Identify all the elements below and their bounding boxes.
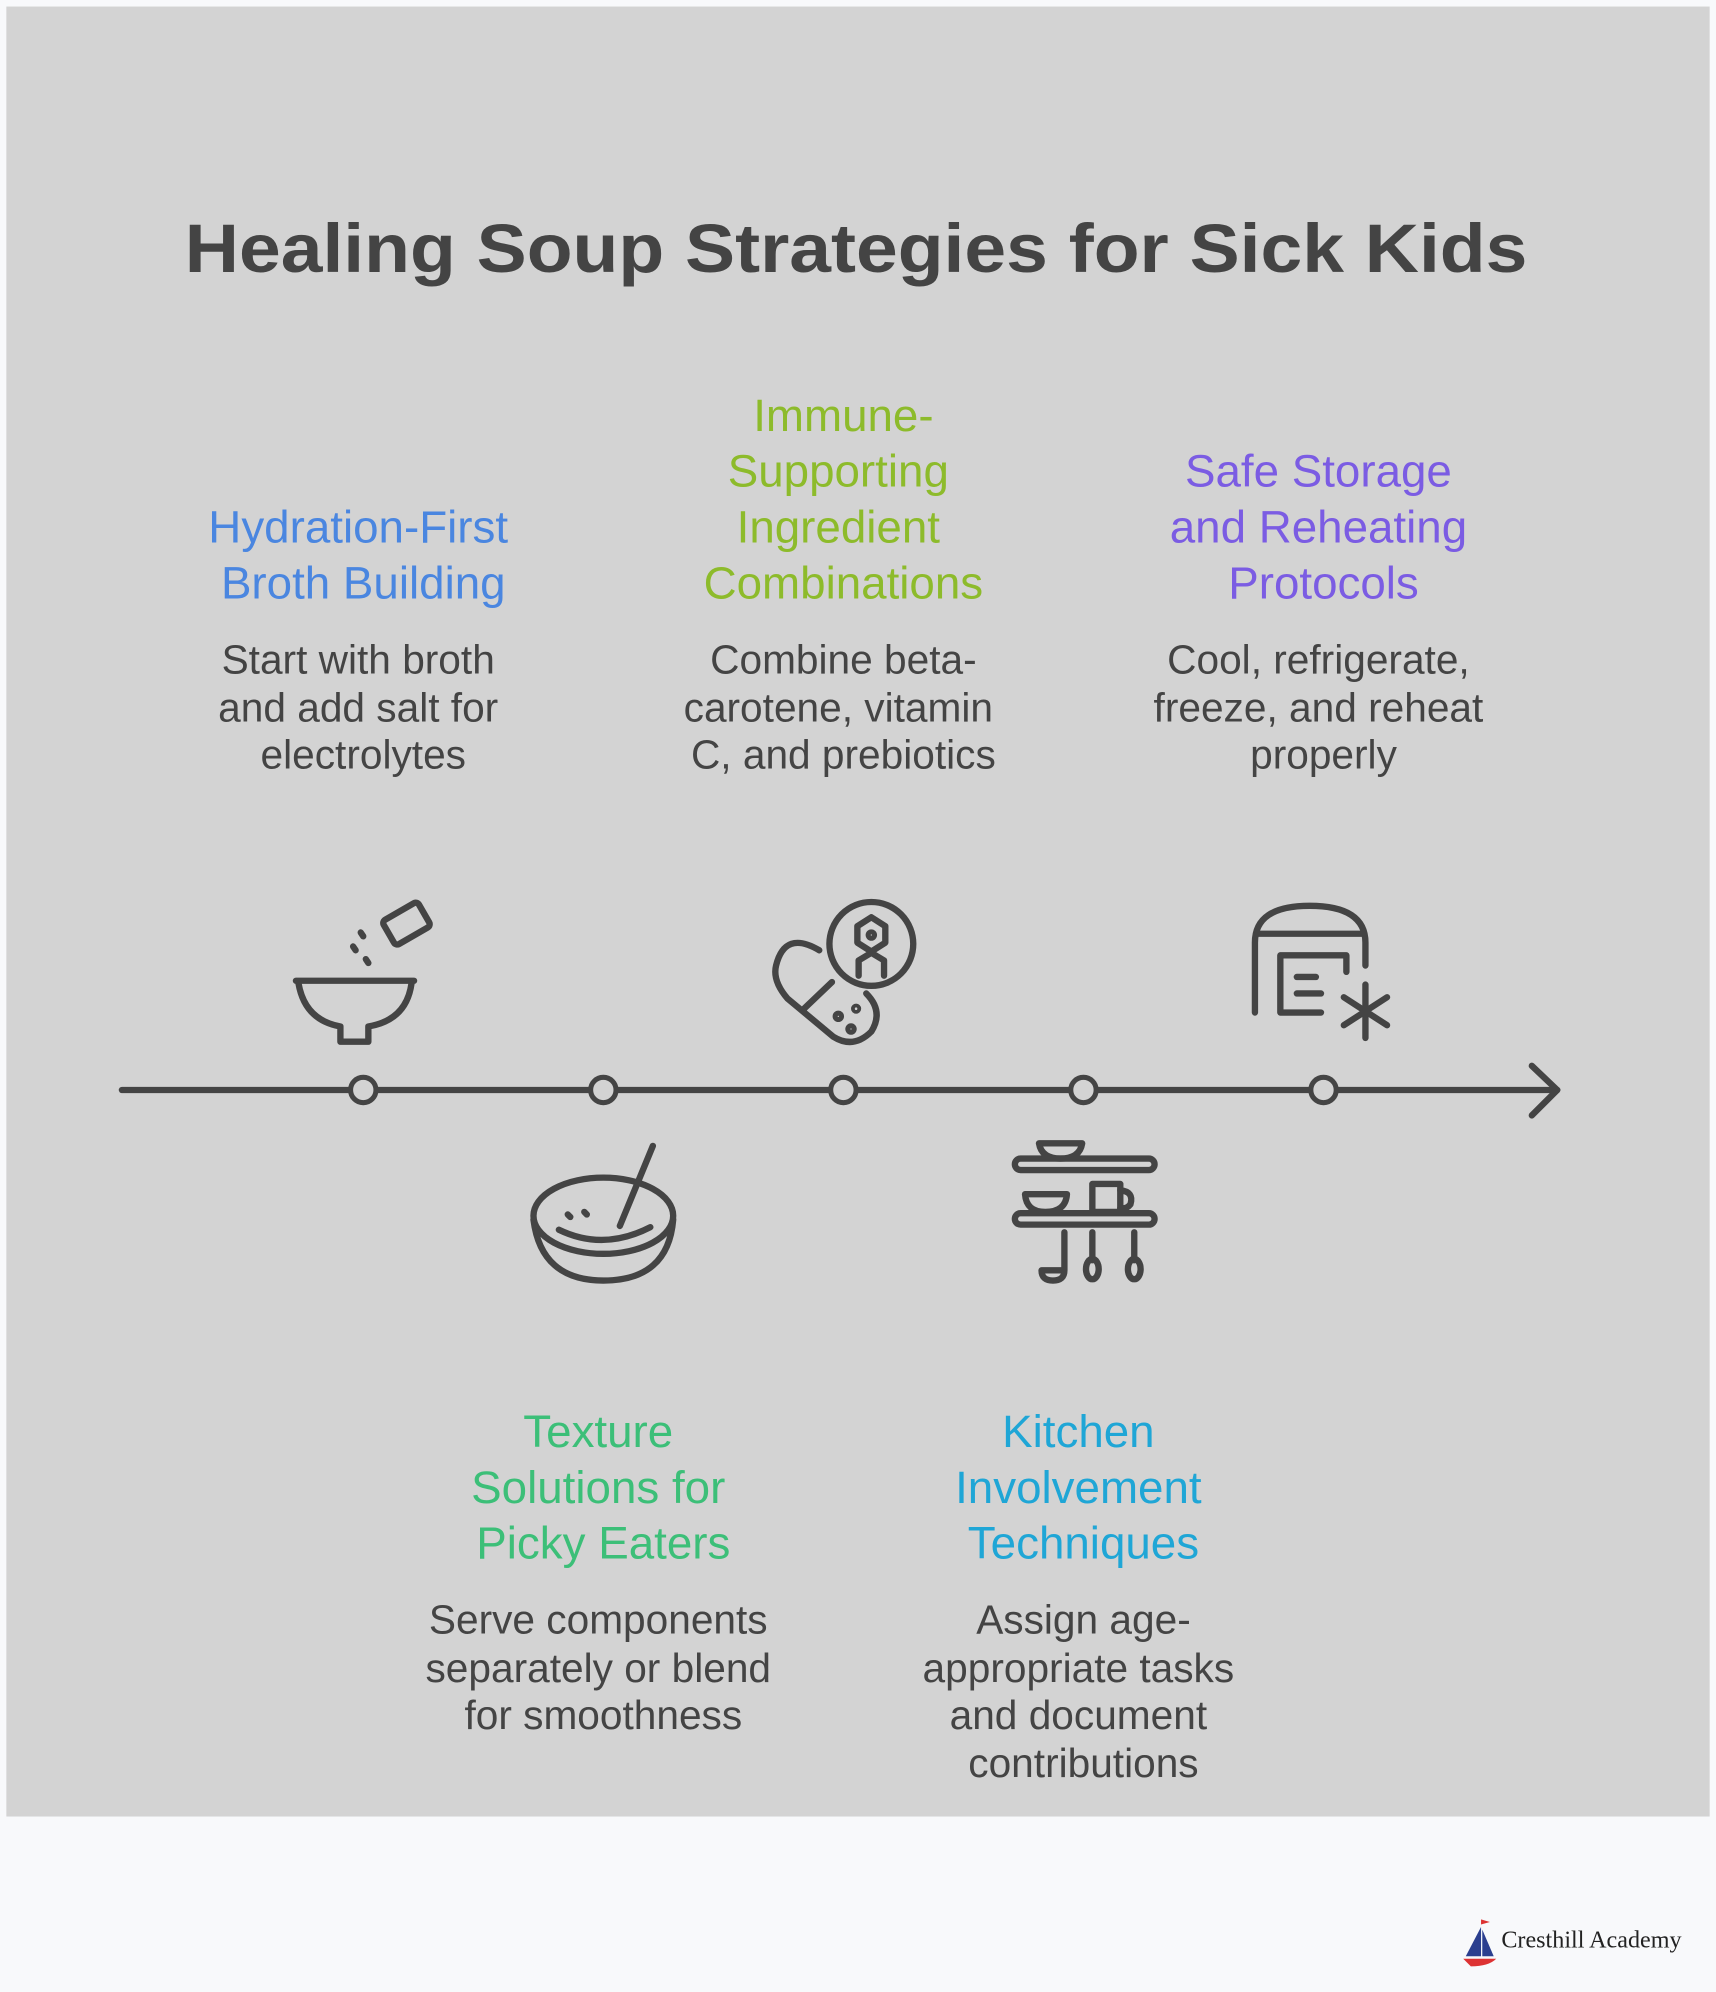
icon: kitchen shelves — [1015, 1143, 1155, 1281]
heading: immune: Supporting — [728, 446, 949, 497]
timeline arrow — [122, 1066, 1557, 1115]
icon: bowl with salt — [296, 901, 431, 1042]
heading: immune: Immune- — [753, 390, 934, 441]
heading: immune: Ingredient — [737, 502, 940, 553]
icon: bowl with spoon — [533, 1146, 673, 1281]
panel: kitchen — [923, 1406, 1234, 1786]
heading: storage: Safe Storage — [1185, 446, 1452, 497]
logo: Cresthill Academy — [1501, 1926, 1682, 1953]
heading: hydration: Hydration-First — [208, 502, 508, 553]
title: Healing Soup Strategies for Sick Kids — [185, 210, 1527, 287]
heading: hydration: Broth Building — [221, 557, 506, 608]
heading: kitchen: Kitchen — [1002, 1406, 1155, 1457]
heading: texture: Solutions for — [471, 1462, 725, 1513]
text: storage: properly — [1250, 732, 1398, 778]
text: texture: for smoothness — [464, 1692, 742, 1738]
text: hydration: and add salt for — [218, 685, 498, 731]
heading: texture: Texture — [523, 1406, 673, 1457]
heading: storage: and Reheating — [1170, 502, 1467, 553]
heading: kitchen: Techniques — [968, 1518, 1199, 1569]
heading: kitchen: Involvement — [955, 1462, 1202, 1513]
text: kitchen: and document — [950, 1692, 1207, 1738]
heading: storage: Protocols — [1228, 557, 1419, 608]
panel: immune — [684, 390, 996, 778]
icon: storage freezer — [1255, 906, 1387, 1038]
heading: texture: Picky Eaters — [476, 1518, 730, 1569]
text: kitchen: appropriate tasks — [923, 1645, 1234, 1691]
heading: immune: Combinations — [704, 557, 983, 608]
icon: immune capsule — [775, 902, 913, 1042]
text: immune: C, and prebiotics — [691, 732, 996, 778]
text: texture: Serve components — [429, 1597, 768, 1643]
text: hydration: Start with broth — [222, 636, 495, 682]
panel: storage — [1154, 446, 1483, 778]
logo — [1463, 1919, 1682, 1966]
text: immune: Combine beta- — [710, 636, 977, 682]
text: storage: freeze, and reheat — [1154, 685, 1483, 731]
text: kitchen: Assign age- — [976, 1597, 1191, 1643]
panel: hydration — [208, 502, 508, 778]
text: texture: separately or blend — [425, 1645, 771, 1691]
text: immune: carotene, vitamin — [684, 685, 993, 731]
panel: texture — [425, 1406, 771, 1738]
text: storage: Cool, refrigerate, — [1167, 636, 1470, 682]
text: kitchen: contributions — [968, 1740, 1199, 1786]
text: hydration: electrolytes — [261, 732, 466, 778]
